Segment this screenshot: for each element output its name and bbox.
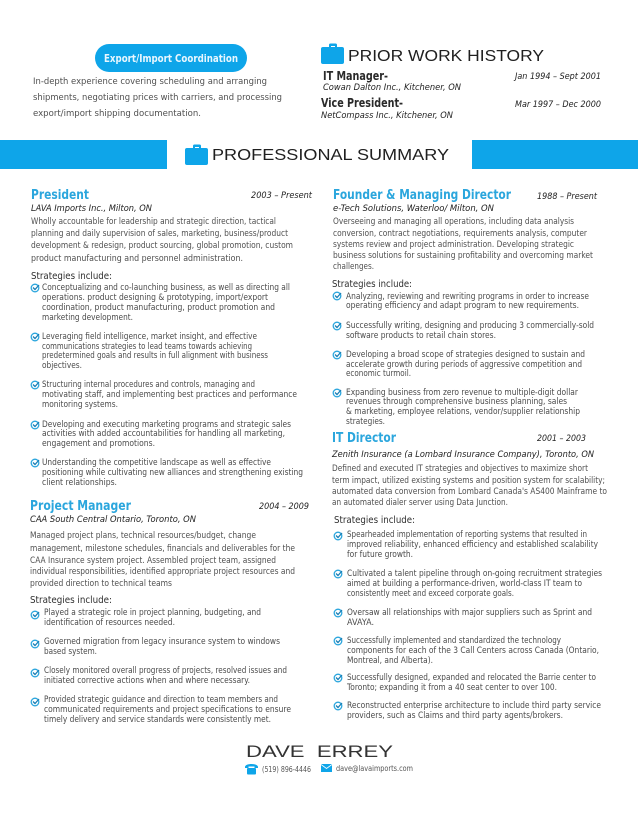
job title: founder: Founder & Managing Director (333, 188, 511, 203)
bullet list: president strategies: Conceptualizing and co-launching business, as well as directing all (42, 283, 290, 293)
left banner bar (0, 140, 167, 169)
bullet list: it director strategies: for future growth. (347, 550, 413, 560)
description: founder: conversion, contract negotiations, requirements analysis, computer (333, 229, 587, 239)
panel: founder and managing director (332, 188, 597, 427)
bullet list: founder strategies: strategies. (346, 417, 385, 427)
bullet list: it director strategies: Successfully designed, expanded and relocated the Barrie center to (347, 673, 596, 683)
subheading: strategies: Strategies include: (334, 515, 415, 526)
company: caa: CAA South Central Ontario, Toronto, ON (30, 514, 196, 525)
bullet list: it director strategies: Spearheaded implementation of reporting systems that resulted in (347, 530, 587, 540)
icon: telephone (245, 764, 258, 774)
bullet list: president strategies: Developing and executing marketing programs and strategic sales (42, 420, 291, 430)
bullet list: president strategies: communications strategies to lead teams towards achieving (42, 342, 252, 352)
icon: envelope (321, 764, 332, 772)
panel: prior work history entries: Mar 1997 – Dec 2000 (515, 100, 601, 110)
description: it director (332, 464, 607, 508)
description: project manager: CAA Insurance system project. Assembled project team, assigned (30, 556, 276, 566)
description: founder: challenges. (333, 262, 374, 272)
footer name: DAVE ERREY (246, 742, 393, 761)
description: it director: an automated dialer server using Data Junction. (332, 498, 508, 508)
bullet list: founder strategies: revenues through comprehensive business planning, sales (346, 397, 567, 407)
bullet list: president strategies: motivating staff, and implementing best practices and performance (42, 390, 297, 400)
description: founder (333, 217, 593, 272)
text block: export import description: In-depth experience covering scheduling and arranging (33, 77, 267, 87)
job title: it director: IT Director (332, 431, 396, 446)
bullet list: founder strategies: operating efficiency and adapt program to new requirements. (346, 301, 579, 311)
text block: export import description: shipments, negotiating prices with carriers, and processing (33, 93, 282, 103)
panel: prior work history entries (321, 69, 601, 121)
bullet list: president strategies: Structuring internal procedures and controls, managing and (42, 380, 255, 390)
text block: export import description (33, 77, 282, 119)
callout: export import coordination: Export/Import Coordination (104, 53, 238, 65)
bullet list: it director strategies: providers, such as Claims and third party agents/brokers. (347, 711, 563, 721)
job title: president: President (31, 188, 89, 203)
subheading: strategies: Strategies include: (30, 595, 112, 606)
bullet list: project manager strategies: identification of resources needed. (44, 618, 175, 628)
description: president: product manufacturing and personnel administration. (31, 254, 243, 264)
bullet list: president strategies: engagement and promotions. (42, 439, 155, 449)
bullet list: founder strategies: & marketing, employee relations, vendor/supplier relationship (346, 407, 580, 417)
bullet list: it director strategies: Cultivated a talent pipeline through on-going recruitment strategies (347, 569, 602, 579)
dates: founder: 1988 – Present (537, 192, 597, 202)
bullet list: founder strategies: Expanding business from zero revenue to multiple-digit dollar (346, 388, 578, 398)
description: project manager: provided direction to technical teams (30, 579, 172, 589)
text block: export import description: export/import shipping documentation. (33, 109, 201, 119)
bullet list: it director strategies: aimed at building a performance-driven, world-class IT team to (347, 579, 582, 589)
bullet list: it director strategies: Successfully implemented and standardized the technology (347, 636, 561, 646)
bullet list: president strategies: objectives. (42, 361, 82, 371)
bullet list: president strategies: positioning while cultivating new alliances and strengthening existing (42, 468, 303, 478)
description: project manager (30, 531, 295, 589)
panel: project manager (30, 499, 309, 725)
bullet list: president strategies (31, 283, 303, 488)
right banner bar (472, 140, 638, 169)
subheading: strategies: Strategies include: (31, 271, 112, 282)
panel: prior work history entries: Cowan Dalton Inc., Kitchener, ON (323, 82, 461, 93)
company: e-tech: e-Tech Solutions, Waterloo/ Milton, ON (333, 203, 494, 214)
bullet list: project manager strategies: timely delivery and service standards were consistently met. (44, 715, 271, 725)
bullet list: president strategies: Understanding the competitive landscape as well as effective (42, 458, 271, 468)
bullet list: founder strategies: economic turmoil. (346, 369, 411, 379)
description: it director: Defined and executed IT strategies and objectives to maximize short (332, 464, 588, 474)
description: founder: business solutions for sustaining profitability and overcoming market (333, 251, 593, 261)
bullet list: president strategies: monitoring systems. (42, 400, 118, 410)
description: president: planning and daily supervision of sales, marketing, business/product (31, 229, 288, 239)
bullet list: project manager strategies (31, 608, 291, 725)
bullet list: president strategies: operations. product designing & prototyping, import/export (42, 293, 269, 303)
bullet list: it director strategies: components for each of the 3 Call Centers across Canada (Ontario, (347, 646, 599, 656)
bullet list: project manager strategies: based system. (44, 647, 97, 657)
panel: prior work history entries: IT Manager- (323, 69, 388, 83)
bullet list: project manager strategies: Closely monitored overall progress of projects, resolved issues and (44, 666, 287, 676)
description: president: Wholly accountable for leadership and strategic direction, tactical (31, 217, 276, 227)
panel: prior work history entries: NetCompass Inc., Kitchener, ON (321, 110, 453, 121)
bullet list: it director strategies (334, 530, 602, 721)
description: project manager: Managed project plans, technical resources/budget, change (30, 531, 256, 541)
bullet list: president strategies: activities with added accountabilities for handling all marketing, (42, 429, 285, 439)
description: project manager: management, milestone schedules, financials and deliverables for the (30, 544, 295, 554)
job title: project manager: Project Manager (30, 499, 131, 514)
bullet list: it director strategies: Oversaw all relationships with major suppliers such as Sprint and (347, 608, 592, 618)
company: zenith: Zenith Insurance (a Lombard Insurance Company), Toronto, ON (331, 449, 594, 460)
bullet list: it director strategies: Reconstructed enterprise architecture to include third party service (347, 701, 601, 711)
panel: it director (331, 431, 607, 721)
icon: briefcase prior work (321, 44, 344, 64)
heading: prior work history: PRIOR WORK HISTORY (348, 48, 544, 65)
subheading: strategies: Strategies include: (332, 279, 412, 290)
description: project manager: individual responsibilities, identified appropriate project resources and (30, 567, 295, 577)
bullet list: president strategies: predetermined goals and results in full alignment with business (42, 351, 268, 361)
bullet list: it director strategies: consistently meet and exceed corporate goals. (347, 589, 514, 599)
bullet list: it director strategies: Montreal, and Alberta). (347, 656, 433, 666)
bullet list: it director strategies: Toronto; expanding it from a 40 seat center to over 100. (346, 683, 557, 693)
email address: dave@lavaimports.com (336, 764, 413, 773)
bullet list: project manager strategies: Governed migration from legacy insurance system to windows (44, 637, 280, 647)
callout: export import coordination (95, 44, 247, 72)
bullet list: project manager strategies: Provided strategic guidance and direction to team members and (44, 695, 278, 705)
bullet list: founder strategies: Analyzing, reviewing and rewriting programs in order to increase (346, 292, 589, 302)
bullet list: president strategies: client relationships. (42, 478, 117, 488)
bullet list: founder strategies: accelerate growth during periods of aggressive competition and (346, 360, 582, 370)
bullet list: founder strategies: Developing a broad scope of strategies designed to sustain and (346, 350, 585, 360)
bullet list: project manager strategies: Played a strategic role in project planning, budgeting, and (44, 608, 261, 618)
description: founder: systems review and project administration. Developing strategic (333, 240, 574, 250)
bullet list: project manager strategies: communicated requirements and project specifications to ensure (44, 705, 291, 715)
bullet list: president strategies: coordination, product manufacturing, product promotion and (42, 303, 275, 313)
bullet list: president strategies: Leveraging field intelligence, market insight, and effective (42, 332, 257, 342)
dates: it director: 2001 – 2003 (537, 434, 586, 444)
dates: project manager: 2004 – 2009 (259, 502, 309, 512)
bullet list: project manager strategies: initiated corrective actions when and where necessary. (44, 676, 250, 686)
bullet list: founder strategies: Successfully writing, designing and producing 3 commercially-sold (346, 321, 594, 331)
heading: professional summary: PROFESSIONAL SUMMARY (212, 147, 449, 164)
bullet list: it director strategies: AVAYA. (347, 618, 374, 628)
panel: prior work history entries: Vice President- (321, 96, 403, 110)
description: president (31, 217, 293, 264)
bullet list: it director strategies: improved reliability, enhanced efficiency and established scalability (347, 540, 598, 550)
bullet list: president strategies: marketing development. (42, 313, 133, 323)
panel: prior work history entries: Jan 1994 – Sept 2001 (513, 72, 601, 82)
bullet list: founder strategies (333, 292, 594, 427)
dates: president: 2003 – Present (251, 191, 312, 201)
description: president: development & redesign, product sourcing, global promotion, custom (31, 241, 293, 251)
icon: briefcase professional summary (185, 144, 208, 165)
phone number: (519) 896-4446 (262, 765, 311, 774)
bullet list: founder strategies: software products to retail chain stores. (346, 331, 496, 341)
panel: president (31, 188, 312, 488)
company: lava imports: LAVA Imports Inc., Milton, ON (31, 203, 152, 214)
description: founder: Overseeing and managing all operations, including data analysis (333, 217, 574, 227)
